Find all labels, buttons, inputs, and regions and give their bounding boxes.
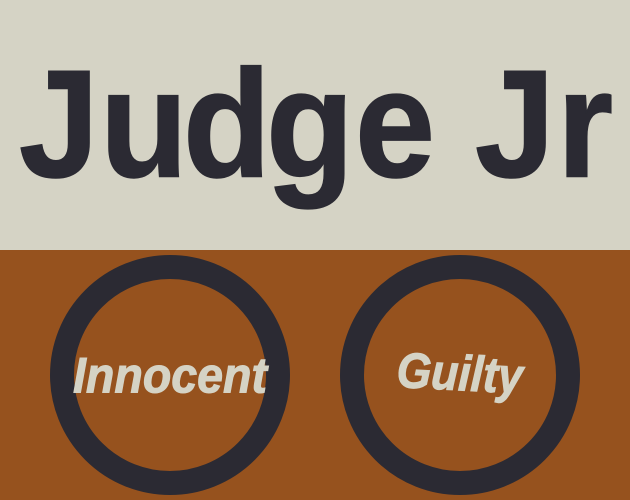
label: guilty: Guilty [395, 342, 526, 405]
panel: title background [0, 0, 630, 250]
button: guilty [352, 267, 568, 483]
ring: innocent [62, 267, 278, 483]
button: innocent [62, 267, 278, 483]
panel: verdict background [0, 250, 630, 500]
title: Judge Jr [19, 39, 613, 209]
ring: guilty [352, 267, 568, 483]
label: innocent: Innocent [73, 348, 269, 404]
